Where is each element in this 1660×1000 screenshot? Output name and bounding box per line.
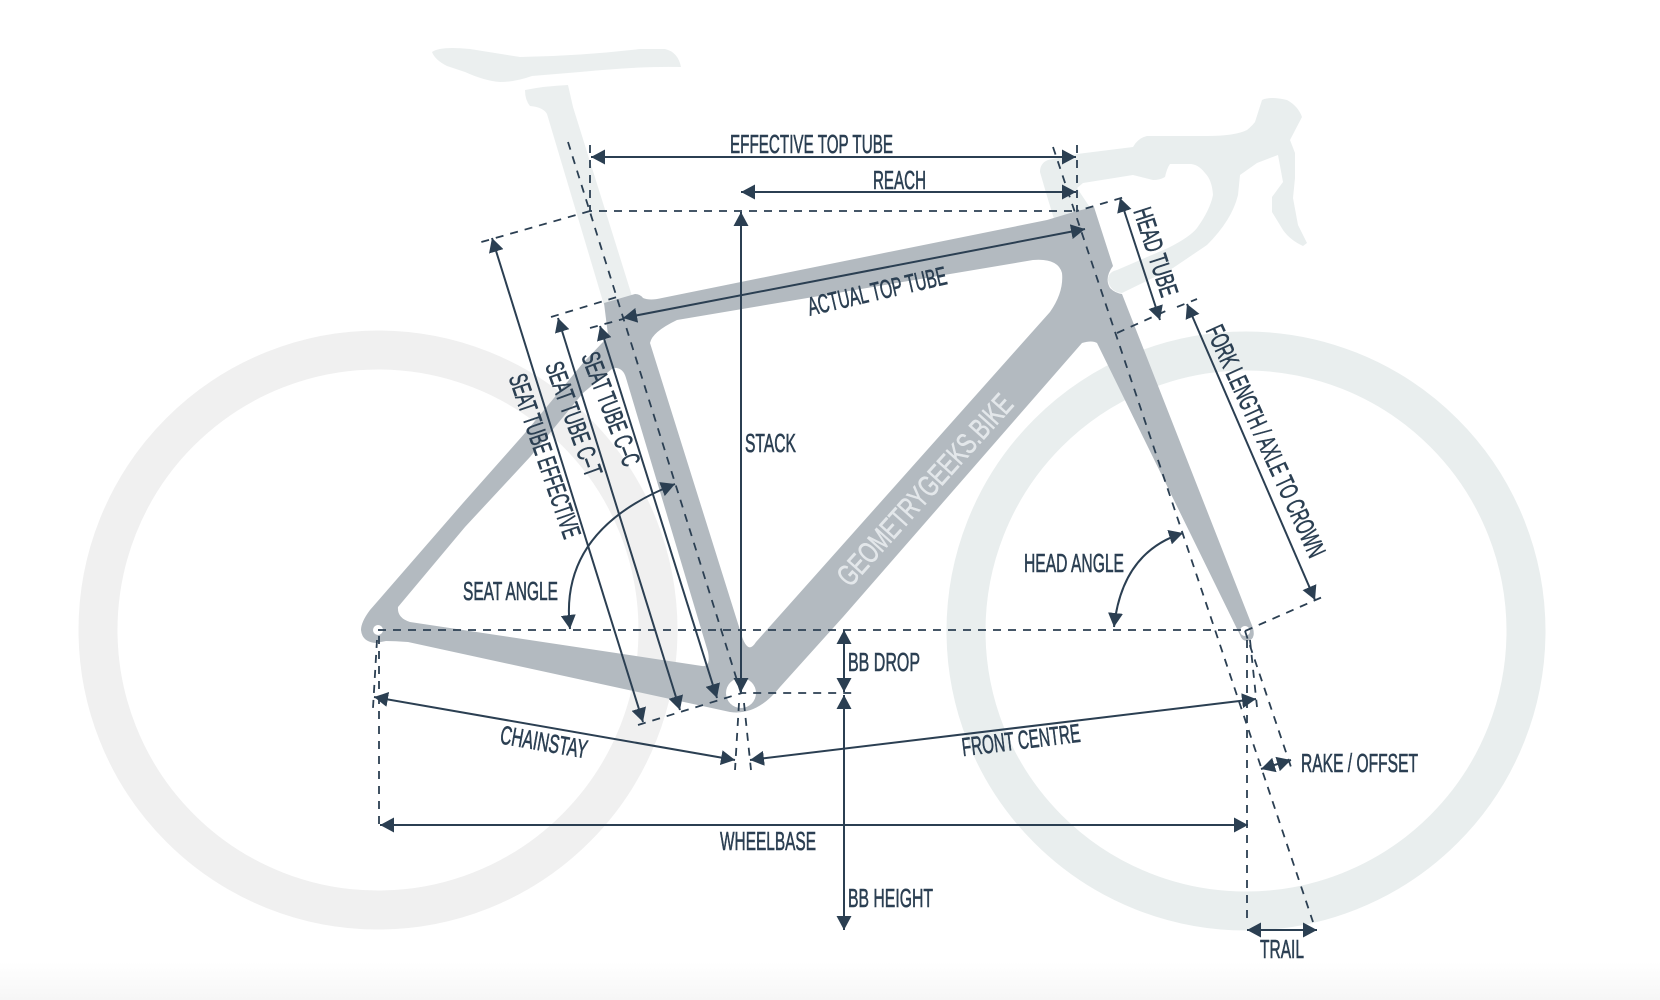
dimension: actual top tube: ACTUAL TOP TUBE — [804, 260, 950, 322]
dimension: chainstay: CHAINSTAY — [498, 720, 590, 764]
dimension: effective top tube: EFFECTIVE TOP TUBE — [730, 129, 893, 159]
dimension: seat tube effective — [492, 238, 643, 722]
handlebar — [1040, 98, 1307, 293]
seatpost — [525, 85, 632, 305]
dimension: trail: TRAIL — [1260, 934, 1304, 964]
dimension: BB drop — [844, 630, 920, 692]
dimension: head angle: HEAD ANGLE — [1024, 548, 1124, 578]
dimension: seat angle: SEAT ANGLE — [463, 576, 558, 606]
dimension: BB drop: BB DROP — [848, 647, 920, 677]
dimension: fork length: FORK LENGTH / AXLE TO CROWN — [1200, 320, 1332, 562]
dashed construction lines — [373, 142, 1327, 925]
dimension: BB height: BB HEIGHT — [848, 883, 933, 913]
dimension: front centre — [750, 699, 1256, 762]
dimension: trail — [1247, 930, 1317, 964]
dimension: head tube: HEAD TUBE — [1128, 204, 1184, 300]
dimension: actual top tube — [623, 229, 1085, 322]
frame — [361, 207, 1254, 712]
dimension: seat tube C-C: SEAT TUBE C–C — [575, 348, 647, 470]
dimension: seat tube C-T — [539, 318, 680, 710]
saddle — [432, 48, 681, 82]
frame watermark: GEOMETRYGEEKS.BIKE — [831, 388, 1020, 593]
dimension: fork length — [1187, 304, 1332, 600]
bottom bracket hole — [726, 678, 756, 708]
dimension: seat tube effective: SEAT TUBE EFFECTIVE — [503, 370, 587, 542]
front wheel — [966, 351, 1526, 911]
dimension: head angle — [1024, 533, 1183, 627]
front axle — [1240, 626, 1250, 636]
dimension: rake / offset — [1261, 748, 1418, 778]
dimension: seat angle — [463, 484, 675, 629]
dimension: seat tube C-T: SEAT TUBE C–T — [539, 357, 609, 481]
dimension: front centre: FRONT CENTRE — [960, 718, 1082, 762]
dimension: reach: REACH — [873, 165, 926, 195]
dimension: rake / offset: RAKE / OFFSET — [1301, 748, 1418, 778]
rear wheel — [98, 350, 658, 910]
dimension: head tube — [1120, 198, 1184, 320]
dimension: wheelbase: WHEELBASE — [720, 826, 816, 856]
dimension: chainstay — [374, 697, 735, 764]
dimension: stack: STACK — [745, 428, 796, 458]
bike silhouette — [98, 48, 1526, 911]
rear axle — [373, 625, 383, 635]
dimension: seat tube C-C — [575, 326, 717, 698]
